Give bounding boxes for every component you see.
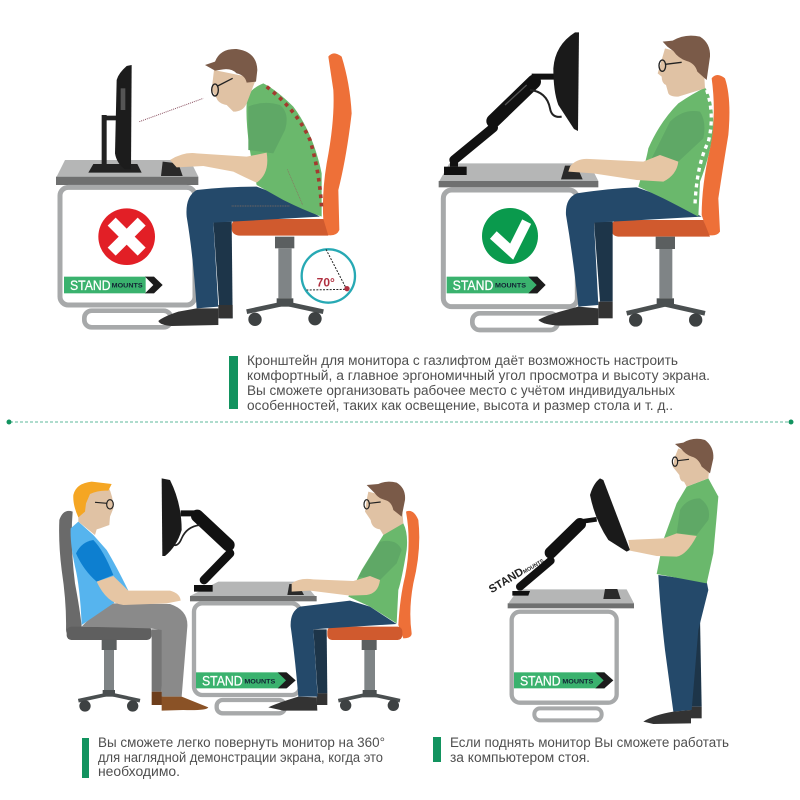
text block: gas-lift benefits: Кронштейн для монитора с газлифтом даёт возможность настроить (247, 353, 678, 368)
banner: Stand Mounts: MOUNTS (112, 284, 143, 290)
banner: Stand Mounts: STAND (202, 672, 243, 688)
monitor on fixed stand (88, 65, 142, 173)
scene: correct posture (439, 32, 729, 330)
desk (190, 582, 317, 713)
arm label: Stand Mounts: STANDMOUNTS (487, 554, 546, 596)
text block: gas-lift benefits (229, 353, 710, 413)
banner: Stand Mounts: STAND (520, 672, 561, 688)
text block: rotate monitor (82, 735, 385, 779)
text block: standing work: Если поднять монитор Вы сможете работать (450, 735, 729, 750)
keyboard (287, 584, 304, 595)
text block: rotate monitor: для наглядной демонстрации экрана, когда это (98, 750, 383, 765)
person: upright (538, 36, 713, 326)
text block: rotate monitor: Вы сможете легко повернуть монитор на 360° (98, 735, 385, 750)
text block: gas-lift benefits: комфортный, а главное эргономичный угол просмотра и высоту экрана. (247, 368, 710, 383)
keyboard (603, 589, 621, 599)
banner: Stand Mounts: STAND (70, 277, 111, 293)
monitor arm (512, 519, 597, 596)
text block: standing work (433, 735, 729, 765)
desk (439, 163, 598, 330)
scene: sharing screen across desk (59, 478, 419, 713)
badge: wrong (98, 208, 155, 265)
badge: correct (482, 208, 538, 264)
banner: Stand Mounts (514, 672, 613, 688)
banner: Stand Mounts (64, 277, 163, 293)
section divider (6, 420, 794, 424)
banner: Stand Mounts (196, 672, 296, 688)
monitor (553, 32, 579, 131)
office chair (232, 53, 352, 326)
scene: bad posture (56, 49, 355, 327)
text block: gas-lift benefits: особенностей, таких как освещение, высота и размер стола и т. д.. (247, 398, 673, 413)
text block: standing work: за компьютером стоя. (450, 750, 590, 765)
banner: Stand Mounts: MOUNTS (562, 679, 593, 685)
person: slouching (158, 49, 322, 326)
office chair (612, 75, 729, 327)
monitor (162, 478, 182, 556)
person: standing (628, 439, 718, 724)
angle diagram: 70 degrees: 70° (317, 276, 335, 290)
banner: Stand Mounts: STAND (453, 277, 493, 293)
banner: Stand Mounts: MOUNTS (244, 679, 275, 685)
tilted monitor (590, 478, 630, 552)
keyboard (161, 162, 183, 176)
angle diagram: 70 degrees (302, 249, 355, 303)
keyboard (561, 166, 583, 179)
gas-lift monitor arm (444, 77, 562, 175)
monitor arm (173, 513, 230, 592)
banner: Stand Mounts (447, 277, 546, 293)
banner: Stand Mounts: MOUNTS (495, 284, 526, 290)
person: blue shirt (71, 482, 208, 711)
person: green shirt (268, 482, 407, 711)
line of sight (139, 98, 203, 122)
orange chair (327, 511, 419, 711)
scene: standing use (487, 439, 718, 724)
text block: gas-lift benefits: Вы сможете организовать рабочее место с учётом индивидуальных (247, 383, 675, 398)
grey chair (59, 511, 152, 712)
desk (56, 160, 198, 327)
text block: rotate monitor: необходимо. (98, 764, 180, 779)
desk (508, 589, 634, 720)
